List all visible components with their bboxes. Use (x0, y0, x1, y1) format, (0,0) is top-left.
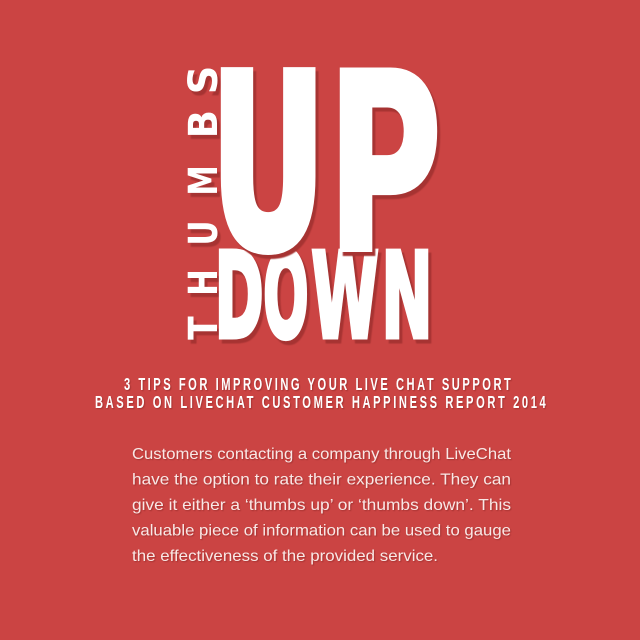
intro paragraph: give it either a ‘thumbs up’ or ‘thumbs down’. This (132, 497, 511, 514)
word: THUMBS (vertical): B (181, 110, 227, 138)
intro paragraph: Customers contacting a company through LiveChat (132, 446, 512, 463)
word: DOWN: N (382, 229, 433, 366)
word: DOWN: W (311, 229, 379, 366)
word: THUMBS (vertical): S (181, 66, 227, 94)
word: THUMBS (vertical) (179, 66, 227, 340)
word: UP: P (327, 20, 442, 320)
intro paragraph: valuable piece of information can be used to gauge (132, 522, 511, 540)
word: THUMBS (vertical): M (181, 165, 227, 196)
word: DOWN: D (215, 227, 264, 365)
intro paragraph: the effectiveness of the provided service. (132, 548, 438, 565)
subtitle heading: BASED ON LIVECHAT CUSTOMER HAPPINESS REPORT 2014 (95, 392, 546, 413)
word: THUMBS (vertical): T (179, 316, 227, 340)
intro paragraph (132, 446, 512, 565)
word: THUMBS (vertical): H (179, 269, 227, 296)
logo wordmark: thumbs up down (187, 67, 440, 346)
word: UP: U (211, 25, 326, 304)
infographic canvas (96, 67, 547, 566)
subtitle heading (95, 374, 546, 413)
word: DOWN (215, 227, 433, 366)
intro paragraph: have the option to rate their experience. They can (132, 472, 511, 488)
word: UP (220, 67, 440, 260)
subtitle heading: 3 TIPS FOR IMPROVING YOUR LIVE CHAT SUPPORT (124, 374, 511, 395)
word: DOWN: O (263, 227, 309, 365)
word: THUMBS (vertical): U (181, 220, 227, 246)
